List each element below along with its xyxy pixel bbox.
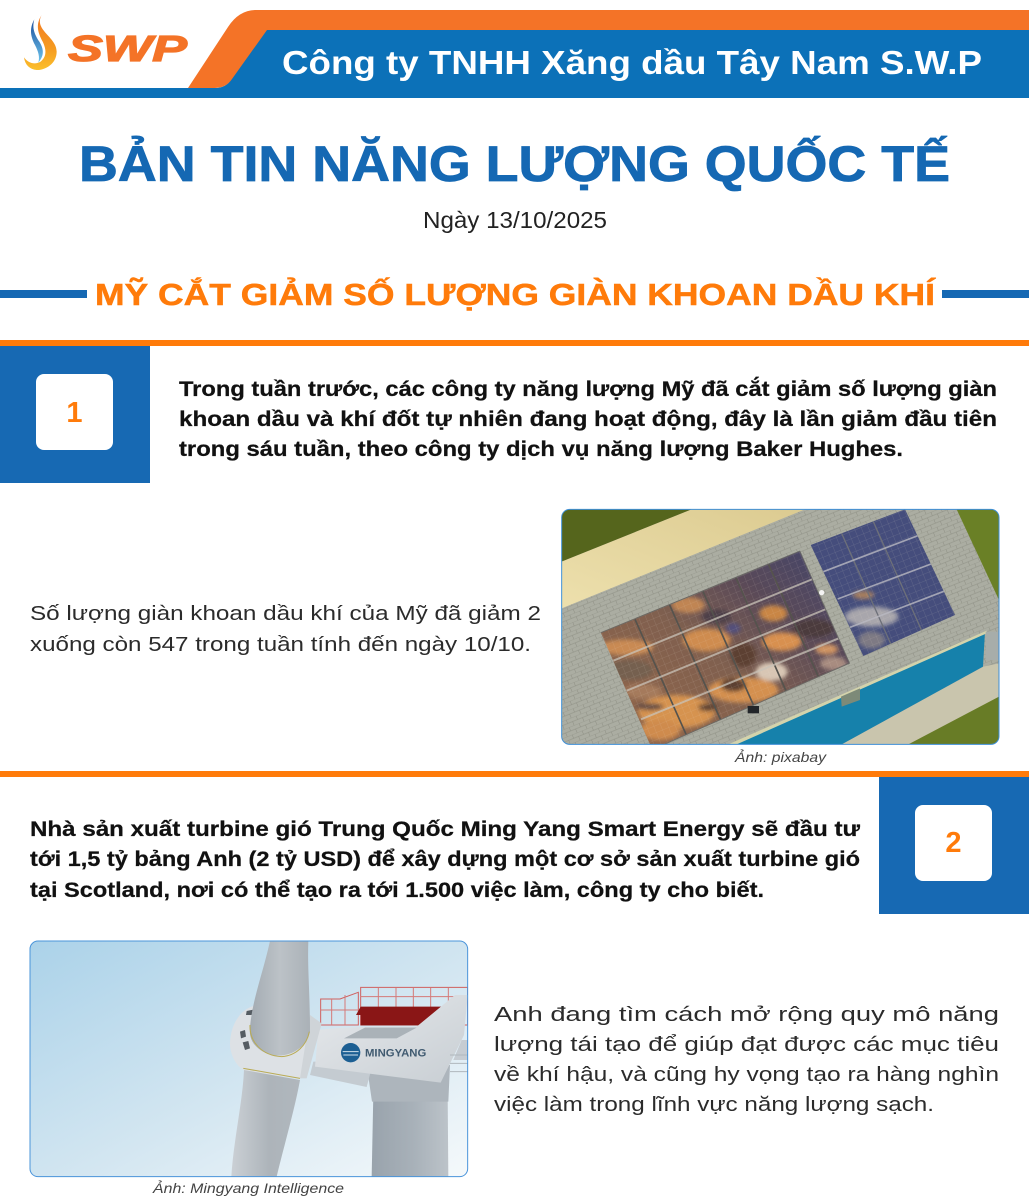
date: Ngày 13/10/2025: [423, 207, 607, 233]
number badge 1: 1: [66, 397, 83, 429]
header banner: [0, 10, 1029, 98]
item 1 lead text: khoan dầu và khí đốt tự nhiên đang hoạt động, đây là lần giảm đầu tiên: [179, 407, 997, 431]
right solar array: [810, 510, 955, 656]
nacelle logo: [341, 1043, 426, 1062]
photo: solar panels on roof: [562, 507, 999, 750]
nacelle: [315, 995, 468, 1083]
panel: item 2: [0, 771, 1029, 914]
item 1 body text: [30, 602, 541, 656]
SWP logo: [24, 15, 188, 70]
number badge 2: 2: [945, 827, 962, 859]
item 2 lead text: Nhà sản xuất turbine gió Trung Quốc Ming Yang Smart Energy sẽ đầu tư: [30, 817, 861, 841]
section heading with side rules: [0, 276, 1029, 312]
upper blade: [250, 941, 310, 1056]
tower: [372, 1094, 448, 1177]
number badge 2: [879, 777, 1029, 914]
item 2 body text: Anh đang tìm cách mở rộng quy mô năng: [494, 1003, 999, 1026]
item 2 lead text: tới 1,5 tỷ bảng Anh (2 tỷ USD) để xây dựng một cơ sở sản xuất turbine gió: [30, 847, 860, 871]
item 1 body text: Số lượng giàn khoan dầu khí của Mỹ đã giảm 2: [30, 602, 541, 625]
item 2 body text: lượng tái tạo để giúp đạt được các mục tiêu: [494, 1033, 999, 1056]
orange header ribbon: [188, 10, 1029, 88]
hub: [230, 1006, 306, 1078]
item 1 lead text: Trong tuần trước, các công ty năng lượng Mỹ đã cắt giảm số lượng giàn: [179, 376, 997, 401]
company name: Công ty TNHH Xăng dầu Tây Nam S.W.P: [282, 44, 982, 81]
item 2 body text: [494, 1003, 999, 1116]
left solar array: [598, 547, 853, 750]
icon: flame: [24, 15, 57, 70]
item 1 body text: xuống còn 547 trong tuần tính đến ngày 10/10.: [30, 633, 531, 656]
blue header band: [0, 30, 1029, 98]
photo: Mingyang wind turbine: [30, 941, 468, 1177]
item 1 lead text: trong sáu tuần, theo công ty dịch vụ năng lượng Baker Hughes.: [179, 437, 903, 461]
item 2 lead text: tại Scotland, nơi có thể tạo ra tới 1.500 việc làm, công ty cho biết.: [30, 878, 764, 902]
item 2 body text: về khí hậu, và cũng hy vọng tạo ra hàng nghìn: [494, 1063, 999, 1086]
panel: item 1: [0, 340, 1029, 483]
yaw cone: [310, 1062, 373, 1087]
section heading with side rules: MỸ CẮT GIẢM SỐ LƯỢNG GIÀN KHOAN DẦU KHÍ: [95, 276, 937, 312]
lower blade: [231, 1070, 300, 1177]
red railing and cabin: [321, 987, 468, 1025]
number badge 1: [0, 346, 150, 483]
title: BẢN TIN NĂNG LƯỢNG QUỐC TẾ: [79, 135, 950, 192]
item 1 lead text: [179, 376, 997, 461]
item 2 lead text: [30, 817, 861, 902]
caption: pixabay: Ảnh: pixabay: [734, 748, 827, 765]
nacelle logo: MINGYANG: [365, 1048, 426, 1060]
logo wordmark: SWP: [68, 28, 188, 69]
item 2 body text: việc làm trong lĩnh vực năng lượng sạch.: [494, 1093, 934, 1116]
caption: Mingyang Intelligence: Ảnh: Mingyang Intelligence: [152, 1179, 344, 1196]
